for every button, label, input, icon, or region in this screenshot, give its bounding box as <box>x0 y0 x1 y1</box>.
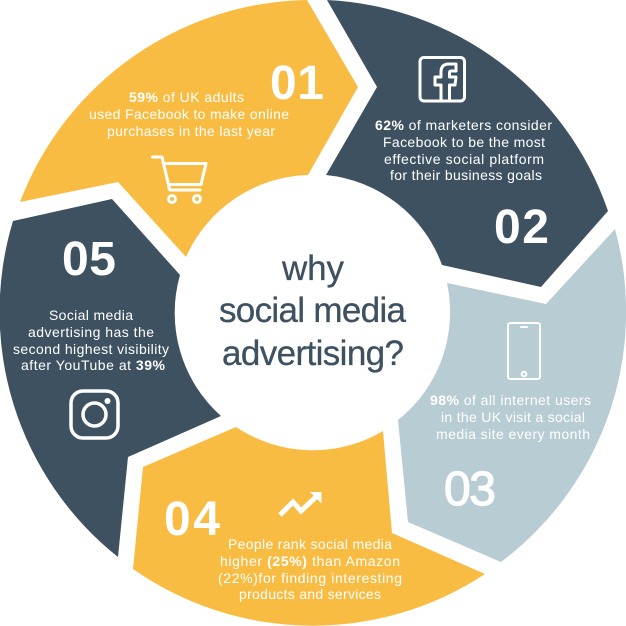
number 02: 02 <box>494 201 549 254</box>
text 03 <box>430 392 591 442</box>
text 05: second highest visibility <box>13 341 169 357</box>
segment shape 02 <box>326 0 608 287</box>
segment shape 03 <box>398 229 626 562</box>
text 02: effective social platform <box>384 151 544 167</box>
title: advertising? <box>222 334 404 373</box>
icon: instagram <box>71 391 118 438</box>
title: why <box>281 249 344 288</box>
text 01 <box>89 89 289 139</box>
number 01: 01 <box>270 57 324 110</box>
text 02: Facebook to be the most <box>383 134 545 150</box>
segment shape 04 <box>133 427 485 626</box>
text 04: People rank social media <box>228 536 392 552</box>
text 04: products and services <box>239 586 381 602</box>
number 04: 04 <box>164 493 220 546</box>
segment shape 05 <box>0 199 221 557</box>
icon: smartphone <box>508 323 540 379</box>
panel 01: Facebook purchases <box>20 0 358 257</box>
text 04: (22%)for finding interesting <box>218 570 402 586</box>
text 05: advertising has the <box>28 324 154 340</box>
text 02: 62% of marketers consider <box>375 117 552 133</box>
text 03: media site every month <box>436 426 590 442</box>
text 05: after YouTube at 39% <box>21 357 166 373</box>
panel 05: visibility <box>0 199 221 557</box>
text 01: 59% of UK adults <box>129 89 244 105</box>
number 05: 05 <box>62 233 116 286</box>
icon: facebook <box>420 58 464 101</box>
text 05: Social media <box>49 307 133 323</box>
text 04 <box>218 536 402 602</box>
segment shape 01 <box>20 0 358 257</box>
text 02 <box>375 117 552 183</box>
icon: shopping cart <box>152 157 206 202</box>
text 01: purchases in the last year <box>107 123 275 139</box>
panel 03: internet users <box>398 229 626 562</box>
text 01: used Facebook to make online <box>89 106 289 122</box>
title <box>219 249 407 373</box>
title: social media <box>219 291 407 330</box>
panel 02: marketers <box>326 0 608 287</box>
text 02: for their business goals <box>390 167 542 183</box>
number 03: 03 <box>444 463 496 516</box>
icon: trend arrow <box>280 492 322 515</box>
panel 04: people rank social media <box>133 427 485 626</box>
text 03: in the UK visit a social <box>441 409 585 425</box>
text 05 <box>13 307 169 373</box>
text 04: higher (25%) than Amazon <box>220 553 400 569</box>
text 03: 98% of all internet users <box>430 392 591 408</box>
